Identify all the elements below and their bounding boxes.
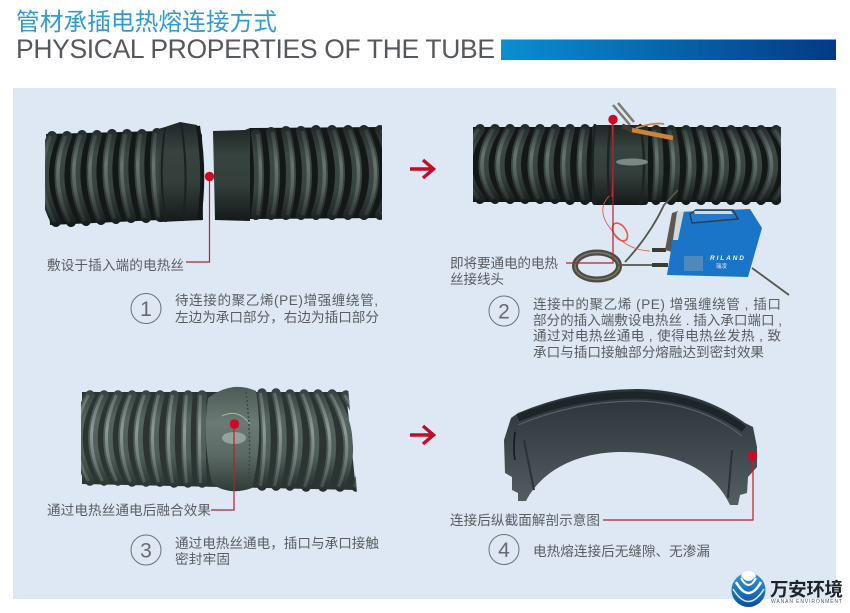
step 3: fused pipe photo bbox=[76, 387, 365, 491]
step 4 description: 电热熔连接后无缝隙、无渗漏 bbox=[533, 543, 710, 559]
step 3 number badge bbox=[131, 535, 161, 565]
step 3 label: 通过电热丝通电后融合效果 bbox=[47, 503, 211, 518]
step 3 description: 密封牢固 bbox=[175, 551, 230, 567]
machine body: RILAND bbox=[710, 255, 744, 262]
step 2 description: 通过对电热丝通电 , 使得电热丝发热 , 致 bbox=[533, 328, 781, 344]
step 2 label bbox=[450, 256, 558, 287]
step 1: separated pipes photo bbox=[42, 122, 393, 225]
arrow: step 1 to step 2 bbox=[410, 160, 434, 178]
logo English wordmark: WANAN ENVIRONMENT bbox=[771, 599, 842, 605]
step 4 number badge bbox=[489, 534, 519, 564]
step 2 description bbox=[533, 296, 782, 360]
title: English heading: PHYSICAL PROPERTIES OF THE TUBE bbox=[16, 34, 495, 64]
logo: Wanan Environment bbox=[732, 571, 843, 607]
step 2 label: 丝接线头 bbox=[450, 271, 504, 287]
cable coil bbox=[575, 190, 789, 295]
step 3 description bbox=[175, 535, 379, 567]
step 1 number badge: 1 bbox=[140, 298, 152, 321]
step 2: electric welding machine and cables bbox=[575, 190, 789, 295]
step 2 label: 即将要通电的电热 bbox=[450, 256, 558, 271]
title gradient bar bbox=[501, 40, 836, 60]
logo emblem bbox=[732, 571, 766, 607]
step 1 label: 敷设于插入端的电热丝 bbox=[47, 258, 184, 273]
title: Chinese heading: 管材承插电热熔连接方式 bbox=[16, 9, 277, 36]
pipe with joint bbox=[466, 124, 790, 205]
machine body bbox=[665, 209, 762, 277]
pipe: spigot end on the right bbox=[213, 127, 392, 221]
step 1 number badge bbox=[131, 294, 161, 324]
step 4: longitudinal section of joint bbox=[504, 389, 757, 505]
step 1 description: 待连接的聚乙烯(PE)增强缠绕管, bbox=[175, 292, 378, 308]
logo Chinese wordmark: 万安环境 bbox=[770, 579, 843, 600]
step 4 number badge: 4 bbox=[498, 539, 510, 562]
step 3 callout: fusion result leader bbox=[211, 419, 239, 510]
welding clamp bbox=[613, 103, 673, 138]
orange-red wire bbox=[603, 196, 650, 251]
step 4 label: 连接后纵截面解剖示意图 bbox=[450, 512, 600, 528]
step 2 callout: heating wire connector leader bbox=[566, 115, 618, 263]
step 1 callout: heating wire leader bbox=[186, 172, 214, 262]
step 3 description: 通过电热丝通电，插口与承口接触 bbox=[175, 535, 379, 551]
step 2 number badge bbox=[489, 296, 519, 326]
arrow: step 3 to step 4 bbox=[410, 426, 434, 444]
step 2 description: 承口与插口接触部分熔融达到密封效果 bbox=[533, 344, 764, 360]
step 1 description: 左边为承口部分，右边为插口部分 bbox=[175, 310, 379, 325]
machine body: 瑞凌 bbox=[716, 262, 728, 270]
step 1 description bbox=[175, 292, 379, 325]
step 2: pipe with welding clamps bbox=[466, 103, 790, 205]
step 2 description: 部分的插入端敷设电热丝 . 插入承口端口 , bbox=[533, 313, 782, 328]
step 4 callout: section leader bbox=[603, 451, 757, 520]
pipe: socket end on the left bbox=[42, 122, 203, 225]
step 2 number badge: 2 bbox=[498, 300, 510, 324]
step 3 number badge: 3 bbox=[140, 540, 152, 562]
step 2 description: 连接中的聚乙烯 (PE) 增强缠绕管 , 插口 bbox=[533, 296, 781, 312]
